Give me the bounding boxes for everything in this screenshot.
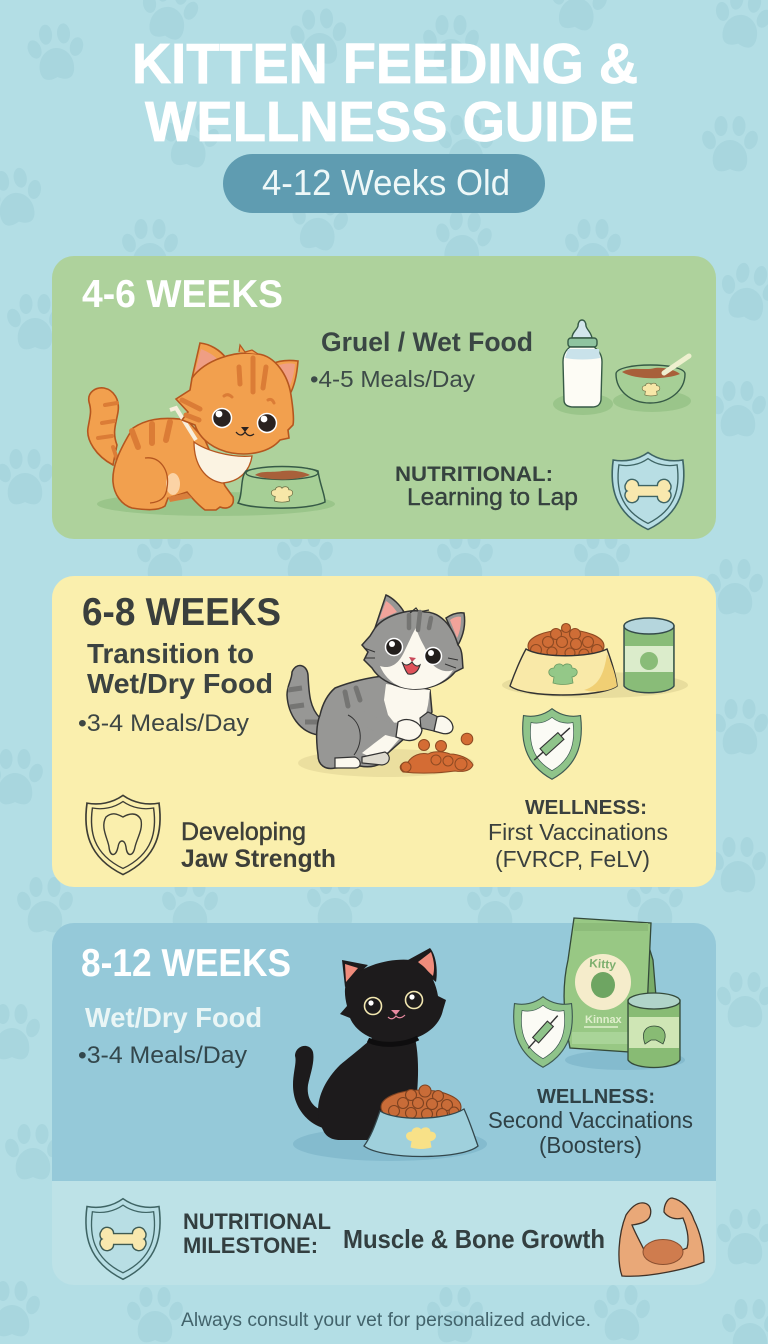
heading: 8-12 weeks: 8-12 WEEKS bbox=[81, 942, 291, 985]
text: transition to wet/dry food: Wet/Dry Food bbox=[87, 668, 273, 699]
title: KITTEN FEEDING & bbox=[132, 32, 638, 96]
text: developing jaw strength: Developing bbox=[181, 818, 306, 846]
icon: flexed muscle arms bbox=[619, 1198, 704, 1276]
icon: vaccine shield bbox=[523, 709, 581, 779]
heading: 6-8 weeks: 6-8 WEEKS bbox=[82, 591, 281, 634]
illustration: black kitten with bowl bbox=[293, 948, 487, 1161]
text: wellness second vaccinations: (Boosters) bbox=[539, 1132, 642, 1158]
icon: bone shield bbox=[86, 1199, 160, 1279]
text: meals per day: •3-4 Meals/Day bbox=[78, 710, 249, 737]
text: wellness second vaccinations bbox=[488, 1086, 693, 1158]
text: wellness first vaccinations: WELLNESS: bbox=[525, 797, 647, 819]
text: nutritional learning to lap: NUTRITIONAL: bbox=[395, 463, 553, 486]
text: wellness first vaccinations: First Vaccinations bbox=[488, 819, 668, 845]
text: muscle and bone growth: Muscle & Bone Growth bbox=[343, 1224, 605, 1254]
illustration: kibble bowl and can bbox=[502, 618, 688, 698]
icon: bowl of gruel with spoon bbox=[613, 356, 691, 412]
illustration: food bag, can and vaccine shield: Kitty bbox=[589, 956, 617, 972]
text: transition to wet/dry food bbox=[87, 638, 273, 699]
text: meals per day: •3-4 Meals/Day bbox=[78, 1042, 247, 1069]
text: nutritional learning to lap bbox=[395, 463, 578, 511]
illustration: food bag, can and vaccine shield bbox=[514, 918, 685, 1070]
text: nutritional milestone: MILESTONE: bbox=[183, 1233, 318, 1258]
icon: bone shield bbox=[612, 452, 684, 530]
footer note: Always consult your vet for personalized advice. bbox=[181, 1310, 591, 1331]
text: wellness first vaccinations: (FVRCP, FeLV) bbox=[495, 846, 650, 872]
icon: tooth shield bbox=[86, 795, 160, 875]
panel: 8-12 weeks bbox=[52, 918, 716, 1181]
panel: nutritional milestone bbox=[52, 1181, 716, 1285]
text: wellness second vaccinations: WELLNESS: bbox=[537, 1086, 655, 1108]
text: transition to wet/dry food: Transition to bbox=[87, 638, 254, 669]
text: wellness second vaccinations: Second Vaccinations bbox=[488, 1107, 693, 1133]
title bbox=[132, 32, 638, 154]
text: nutritional milestone: NUTRITIONAL bbox=[183, 1209, 331, 1234]
illustration: gray kitten with kibble bbox=[287, 595, 474, 777]
illustration: food bag, can and vaccine shield: Kinnax bbox=[585, 1014, 623, 1026]
subtitle pill bbox=[223, 154, 545, 213]
text: wet/dry food: Wet/Dry Food bbox=[85, 1002, 262, 1033]
heading: 4-6 weeks: 4-6 WEEKS bbox=[82, 273, 283, 316]
text: developing jaw strength bbox=[181, 818, 336, 873]
text: gruel / wet food: Gruel / Wet Food bbox=[321, 327, 533, 357]
text: nutritional milestone bbox=[183, 1209, 331, 1258]
text: meals per day: •4-5 Meals/Day bbox=[310, 366, 476, 392]
subtitle pill: 4-12 Weeks Old bbox=[262, 162, 510, 203]
illustration: orange kitten with bowl bbox=[88, 343, 335, 516]
text: wellness first vaccinations bbox=[488, 797, 668, 872]
text: nutritional learning to lap: Learning to Lap bbox=[407, 484, 578, 511]
icon: milk bottle bbox=[553, 320, 613, 415]
panel: 4-6 weeks bbox=[52, 256, 716, 539]
text: developing jaw strength: Jaw Strength bbox=[181, 845, 336, 873]
panel: 6-8 weeks bbox=[52, 576, 716, 887]
title: WELLNESS GUIDE bbox=[145, 90, 635, 154]
